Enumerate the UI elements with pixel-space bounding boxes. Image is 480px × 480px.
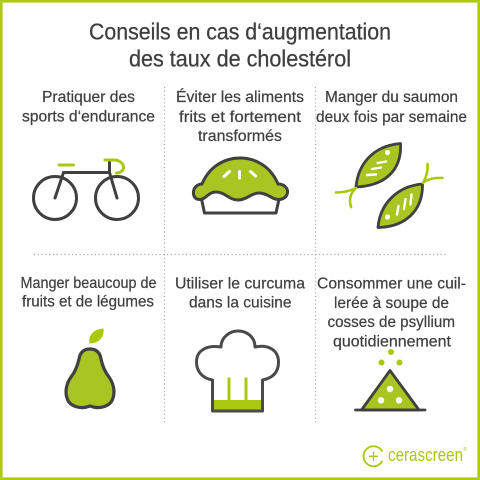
logo: cerascreen: ® <box>463 446 467 453</box>
heading: endurance sports: Pratiquer des <box>42 89 135 106</box>
title: Conseils en cas d‘augmentation <box>89 18 391 44</box>
panel: endurance sports <box>22 89 155 220</box>
fish lower <box>378 164 442 228</box>
heading: endurance sports: sports d‘endurance <box>22 108 155 126</box>
panel: fruits and vegetables <box>20 275 156 408</box>
heading: avoid fried food: Éviter les aliments <box>176 89 304 106</box>
title <box>89 18 391 72</box>
heading: fruits and vegetables: Manger beaucoup de <box>20 275 156 292</box>
icon: chef hat <box>196 331 278 411</box>
icon: powder heap <box>356 349 425 410</box>
heading: turmeric <box>175 276 305 312</box>
heading: turmeric: dans la cuisine <box>189 294 292 312</box>
heading: psyllium: quotidiennement <box>333 334 452 350</box>
icon: two fish <box>336 144 442 228</box>
heading: endurance sports <box>22 89 155 126</box>
fish upper <box>336 144 401 207</box>
heading: fruits and vegetables: fruits et de légumes <box>22 294 154 310</box>
logo: cerascreen: cerascreen <box>388 445 463 465</box>
heading: psyllium: Consommer une cuil- <box>317 276 466 292</box>
heading: fruits and vegetables <box>20 275 156 310</box>
title: des taux de cholestérol <box>129 46 351 72</box>
icon: pie <box>193 158 288 213</box>
heading: avoid fried food <box>176 89 304 145</box>
icon: bicycle <box>34 160 138 220</box>
heading: psyllium <box>317 276 466 350</box>
heading: psyllium: cosses de psyllium <box>328 314 455 331</box>
heading: avoid fried food: frits et fortement <box>179 109 302 126</box>
panel: salmon <box>316 89 467 228</box>
heading: psyllium: lerée à soupe de <box>334 295 449 312</box>
panel: turmeric <box>175 276 305 411</box>
heading: avoid fried food: transformés <box>198 128 282 145</box>
panel: psyllium <box>317 276 466 410</box>
heading: salmon: Manger du saumon <box>325 89 458 106</box>
heading: turmeric: Utiliser le curcuma <box>175 276 305 292</box>
logo: cerascreen <box>363 445 467 466</box>
icon: pear <box>66 328 114 408</box>
heading: salmon: deux fois par semaine <box>316 109 467 126</box>
panel: avoid fried food <box>176 89 304 213</box>
heading: salmon <box>316 89 467 126</box>
